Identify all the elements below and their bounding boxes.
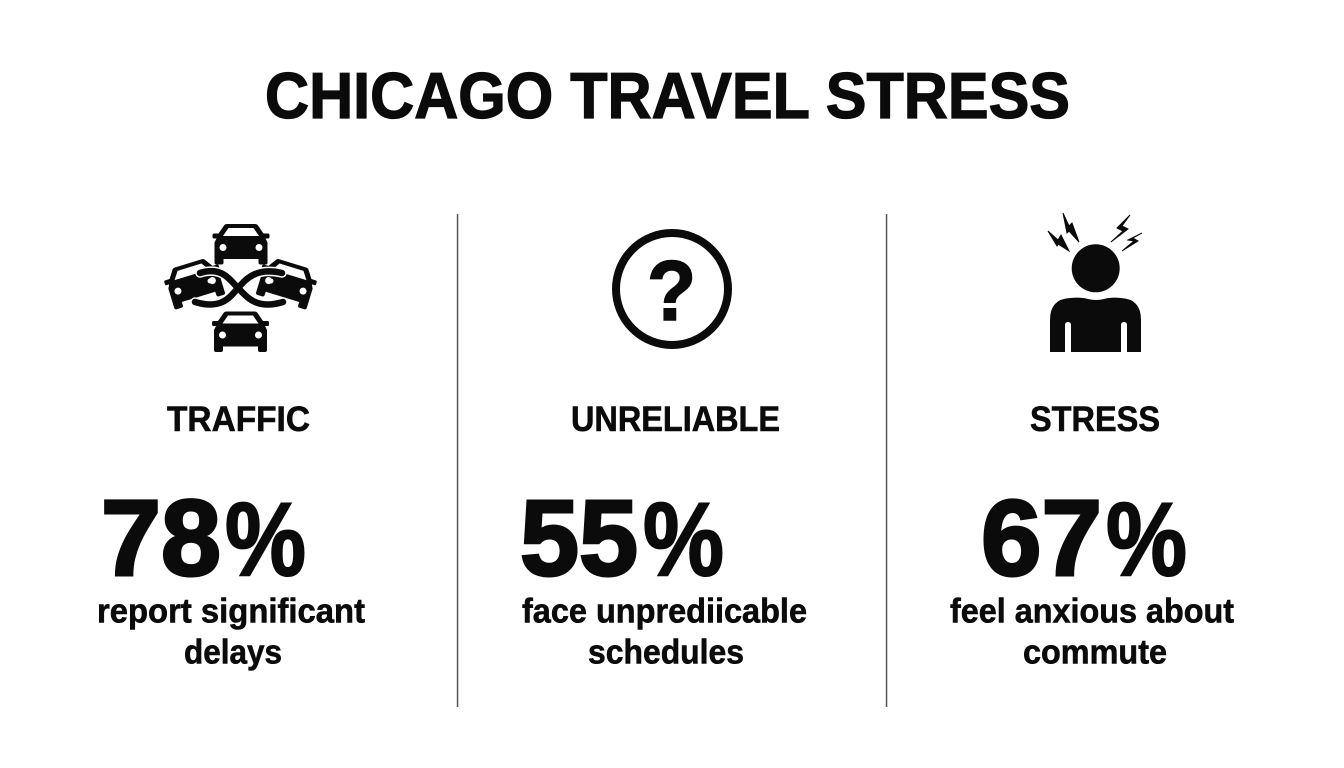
stat: 55%: 55 xyxy=(520,477,638,598)
description: traffic: report significant xyxy=(97,592,365,630)
icon: question mark in circle: ? xyxy=(647,243,696,338)
panel: stress xyxy=(950,213,1234,672)
stat: 78% xyxy=(101,477,306,598)
description: stress: commute xyxy=(1023,634,1167,672)
description: traffic xyxy=(97,592,365,672)
icon: question mark in circle xyxy=(616,233,728,345)
description: unreliable xyxy=(522,592,807,672)
panel: unreliable xyxy=(520,233,807,672)
icon: interlinked cars xyxy=(161,224,320,352)
heading: unreliable: UNRELIABLE xyxy=(571,400,780,439)
description: unreliable: face unprediicable xyxy=(522,592,807,630)
stat: 55%: % xyxy=(643,482,724,598)
panel: traffic xyxy=(97,224,365,672)
stat: 67% xyxy=(981,477,1187,598)
divider right xyxy=(886,214,887,707)
description: stress xyxy=(950,592,1234,672)
heading: traffic: TRAFFIC xyxy=(167,400,310,439)
description: stress: feel anxious about xyxy=(950,592,1234,630)
stat: 67%: 67 xyxy=(981,477,1102,598)
title: CHICAGO TRAVEL STRESS xyxy=(265,59,1070,132)
heading: stress: STRESS xyxy=(1030,400,1160,439)
description: traffic: delays xyxy=(184,634,282,672)
stat: 78%: % xyxy=(225,482,306,598)
stat: 67%: % xyxy=(1106,482,1187,598)
description: unreliable: schedules xyxy=(588,634,744,672)
divider left xyxy=(457,214,458,707)
stat: 55% xyxy=(520,477,724,598)
icon: stressed person xyxy=(1048,213,1142,352)
stat: 78%: 78 xyxy=(101,477,221,598)
